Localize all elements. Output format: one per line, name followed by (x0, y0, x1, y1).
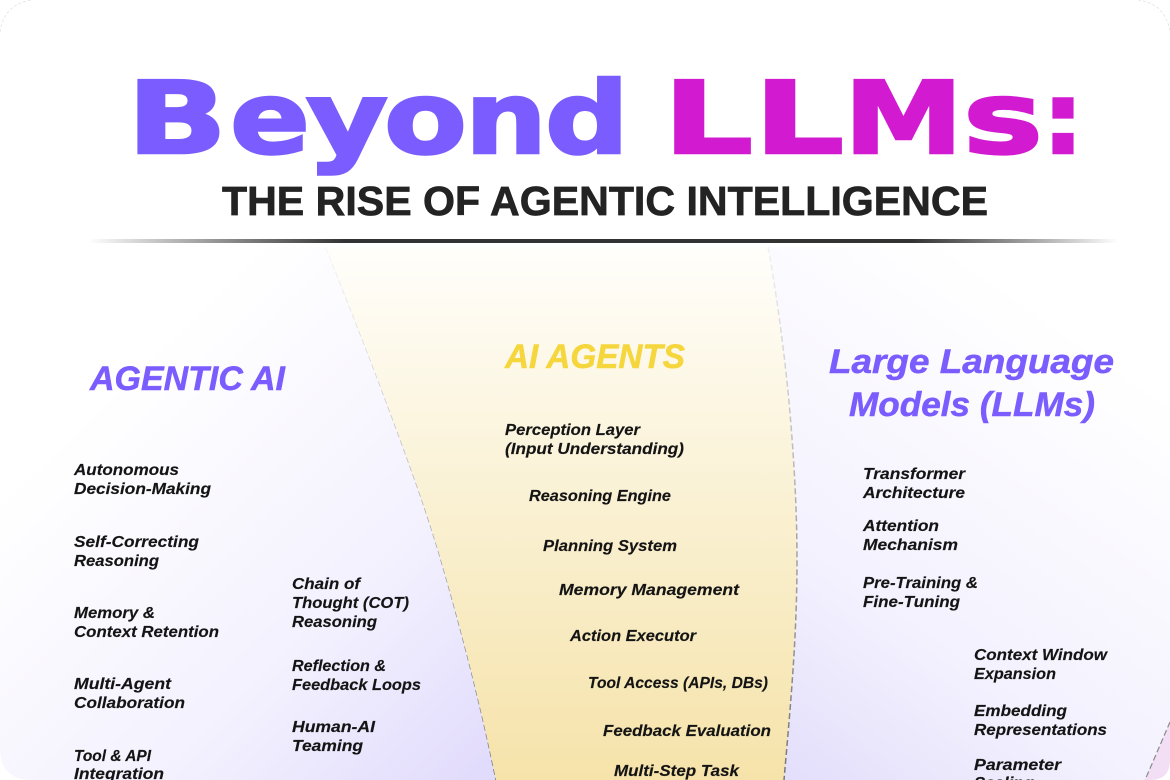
list: AI Agents components: Tool Access (APIs, DBs) (588, 675, 768, 692)
list: LLM column 1: Fine-Tuning (863, 594, 961, 611)
title: y (306, 60, 388, 177)
list: LLM column 2: Context Window (974, 647, 1108, 664)
title: B (127, 60, 227, 177)
list: LLM column 1: Pre-Training & (863, 575, 978, 592)
title: M (844, 60, 963, 177)
list: Agentic AI column 2: Human-AI (292, 719, 376, 736)
list: Agentic AI column 1: Decision-Making (74, 481, 212, 498)
heading: AI Agents: AI AGENTS (504, 338, 685, 376)
list: LLM column 2: Embedding (974, 703, 1068, 720)
title: : (1042, 60, 1084, 177)
list: AI Agents components (505, 422, 771, 780)
list: Agentic AI column 2: Teaming (292, 738, 364, 755)
panel: Agentic AI (0, 247, 496, 780)
list: LLM column 1: Architecture (862, 485, 965, 502)
list: LLM column 1: Transformer (863, 466, 966, 483)
title: L (754, 60, 844, 177)
list: Agentic AI column 2: Thought (COT) (292, 595, 409, 612)
corner: pink panel (1145, 722, 1170, 780)
list: Agentic AI column 1: Tool & API (74, 748, 152, 765)
panel: Large Language Models (768, 247, 1170, 780)
list: Agentic AI column 1: Autonomous (73, 462, 179, 479)
list: LLM column 2: Parameter (974, 757, 1062, 774)
heading: Large Language Models: Large Language (829, 343, 1114, 381)
list: LLM column 2 (974, 647, 1108, 780)
decorative outline arc (0, 0, 1170, 32)
list: Agentic AI column 1 (73, 462, 219, 780)
heading: Agentic AI: AGENTIC AI (89, 360, 287, 398)
list: AI Agents components: Reasoning Engine (529, 488, 671, 505)
list: AI Agents components: Multi-Step Task (614, 763, 741, 780)
header divider (88, 239, 1118, 243)
title: L (663, 60, 753, 177)
title (127, 60, 1084, 177)
list: Agentic AI column 2: Reflection & (292, 658, 386, 675)
list: Agentic AI column 2: Feedback Loops (292, 677, 421, 694)
list: AI Agents components: (Input Understanding) (505, 441, 684, 458)
panel: AI Agents (326, 247, 797, 780)
list: AI Agents components: Perception Layer (505, 422, 641, 439)
list: Agentic AI column 2 (292, 576, 421, 755)
list: Agentic AI column 1: Context Retention (74, 624, 219, 641)
title: s (963, 60, 1043, 177)
list: Agentic AI column 1: Self-Correcting (74, 534, 200, 551)
list: LLM column 1: Mechanism (863, 537, 958, 554)
list: AI Agents components: Planning System (543, 538, 677, 555)
list: AI Agents components: Memory Management (559, 582, 740, 599)
title: d (545, 60, 629, 177)
list: Agentic AI column 2: Chain of (292, 576, 362, 593)
list: Agentic AI column 1: Memory & (74, 605, 155, 622)
list: Agentic AI column 2: Reasoning (292, 614, 378, 631)
title: n (465, 60, 547, 177)
list: LLM column 2: Expansion (974, 666, 1056, 683)
heading: Large Language Models (829, 343, 1114, 424)
list: LLM column 1: Attention (862, 518, 939, 535)
list: LLM column 2: Representations (974, 722, 1107, 739)
list: Agentic AI column 1: Multi-Agent (74, 676, 172, 693)
list: LLM column 1 (862, 466, 978, 611)
list: AI Agents components: Action Executor (569, 628, 697, 645)
title: o (384, 60, 467, 177)
list: Agentic AI column 1: Collaboration (74, 695, 185, 712)
subtitle: THE RISE OF AGENTIC INTELLIGENCE (222, 178, 988, 224)
list: AI Agents components: Feedback Evaluation (603, 723, 771, 740)
heading: Large Language Models: Models (LLMs) (849, 386, 1095, 424)
title: e (230, 60, 310, 177)
list: Agentic AI column 1: Reasoning (74, 553, 160, 570)
